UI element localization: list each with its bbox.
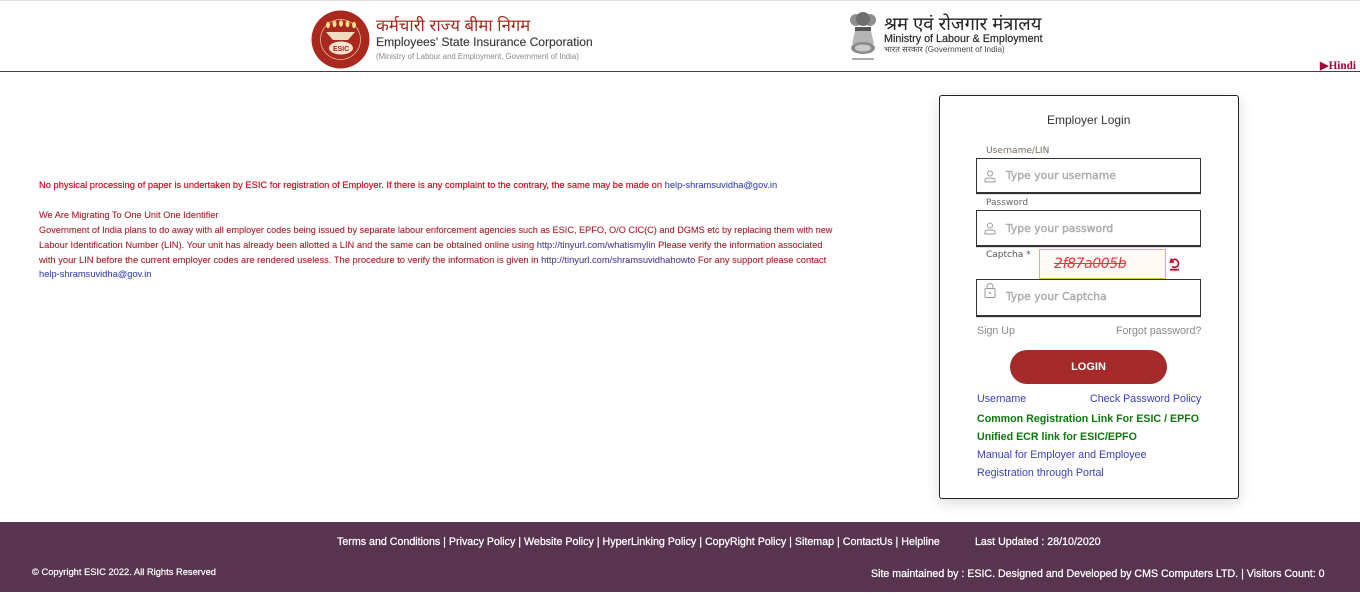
captcha image	[1039, 249, 1166, 279]
icon: lock	[984, 283, 996, 298]
last updated: Last Updated : 28/10/2020	[975, 536, 1101, 548]
icon: refresh captcha	[1169, 258, 1180, 271]
icon: user	[984, 170, 996, 182]
header	[0, 0, 1360, 72]
ESIC Hindi name: कर्मचारी राज्य बीमा निगम	[376, 16, 530, 35]
ESIC ministry line: (Ministry of Labour and Employment, Government of India)	[376, 52, 579, 61]
login heading: Employer Login	[1047, 113, 1130, 127]
sign up link: Sign Up	[977, 325, 1015, 337]
captcha text: 2f87a005b	[1054, 256, 1126, 272]
footer	[0, 522, 1360, 592]
captcha label: Captcha *	[986, 250, 1031, 260]
login button	[1010, 350, 1167, 384]
icon: ESIC logo: ESIC	[333, 46, 349, 53]
migration paragraph: Government of India plans to do away with all employer codes being issued by separate labour enforcement agencies such as ESIC, EPFO, O/O CIC(C) and DGMS etc by replacing them with new	[39, 225, 832, 235]
password input	[976, 210, 1201, 247]
Hindi language link: ▶Hindi	[1320, 60, 1356, 72]
notice text: help-shramsuvidha@gov.in	[39, 269, 151, 279]
ESIC English name: Employees' State Insurance Corporation	[376, 35, 593, 49]
captcha input	[976, 279, 1201, 317]
panel: employer login	[939, 95, 1239, 499]
icon: ESIC logo	[312, 10, 370, 68]
migration heading: We Are Migrating To One Unit One Identifier	[39, 210, 219, 220]
copyright: © Copyright ESIC 2022. All Rights Reserved	[32, 567, 216, 577]
notice text: with your LIN before the current employer codes are rendered useless. The procedure to verify the information is given in http://tinyurl.com/shramsuvidhahowto For any support please contact	[39, 255, 826, 265]
footer links: Terms and Conditions | Privacy Policy | Website Policy | HyperLinking Policy | CopyRight Policy | Sitemap | ContactUs | Helpline	[337, 536, 940, 548]
site maintained credit: Site maintained by : ESIC. Designed and Developed by CMS Computers LTD. | Visitors Count: 0	[871, 568, 1325, 580]
manual link: Manual for Employer and Employee	[977, 449, 1146, 461]
forgot password link: Forgot password?	[1116, 325, 1201, 337]
unified ECR link: Unified ECR link for ESIC/EPFO	[977, 431, 1137, 443]
login button: LOGIN	[1071, 361, 1106, 373]
username link: Username	[977, 393, 1026, 405]
Ministry government line: भारत सरकार (Government of India)	[884, 45, 1005, 54]
username placeholder: Type your username	[1006, 169, 1116, 182]
icon: user	[984, 222, 996, 234]
notice text	[38, 180, 832, 279]
username label: Username/LIN	[986, 146, 1049, 156]
icon: national emblem	[850, 12, 876, 60]
Ministry English name: Ministry of Labour & Employment	[884, 33, 1043, 45]
password placeholder: Type your password	[1006, 222, 1113, 235]
Ministry Hindi name: श्रम एवं रोजगार मंत्रालय	[884, 13, 1041, 34]
red notice: No physical processing of paper is undertaken by ESIC for registration of Employer. If there is any complaint to the contrary, the same may be made on help-shramsuvidha@gov.in	[39, 180, 777, 190]
registration portal link: Registration through Portal	[977, 467, 1104, 479]
notice text: Labour Identification Number (LIN). Your unit has already been allotted a LIN and the same can be obtained online using http://tinyurl.com/whatismylin Please verify the information associated	[39, 240, 822, 250]
common registration link: Common Registration Link For ESIC / EPFO	[977, 413, 1199, 425]
username input	[976, 158, 1201, 194]
check password policy link: Check Password Policy	[1090, 393, 1201, 405]
captcha placeholder: Type your Captcha	[1006, 290, 1107, 303]
password label: Password	[986, 198, 1028, 208]
